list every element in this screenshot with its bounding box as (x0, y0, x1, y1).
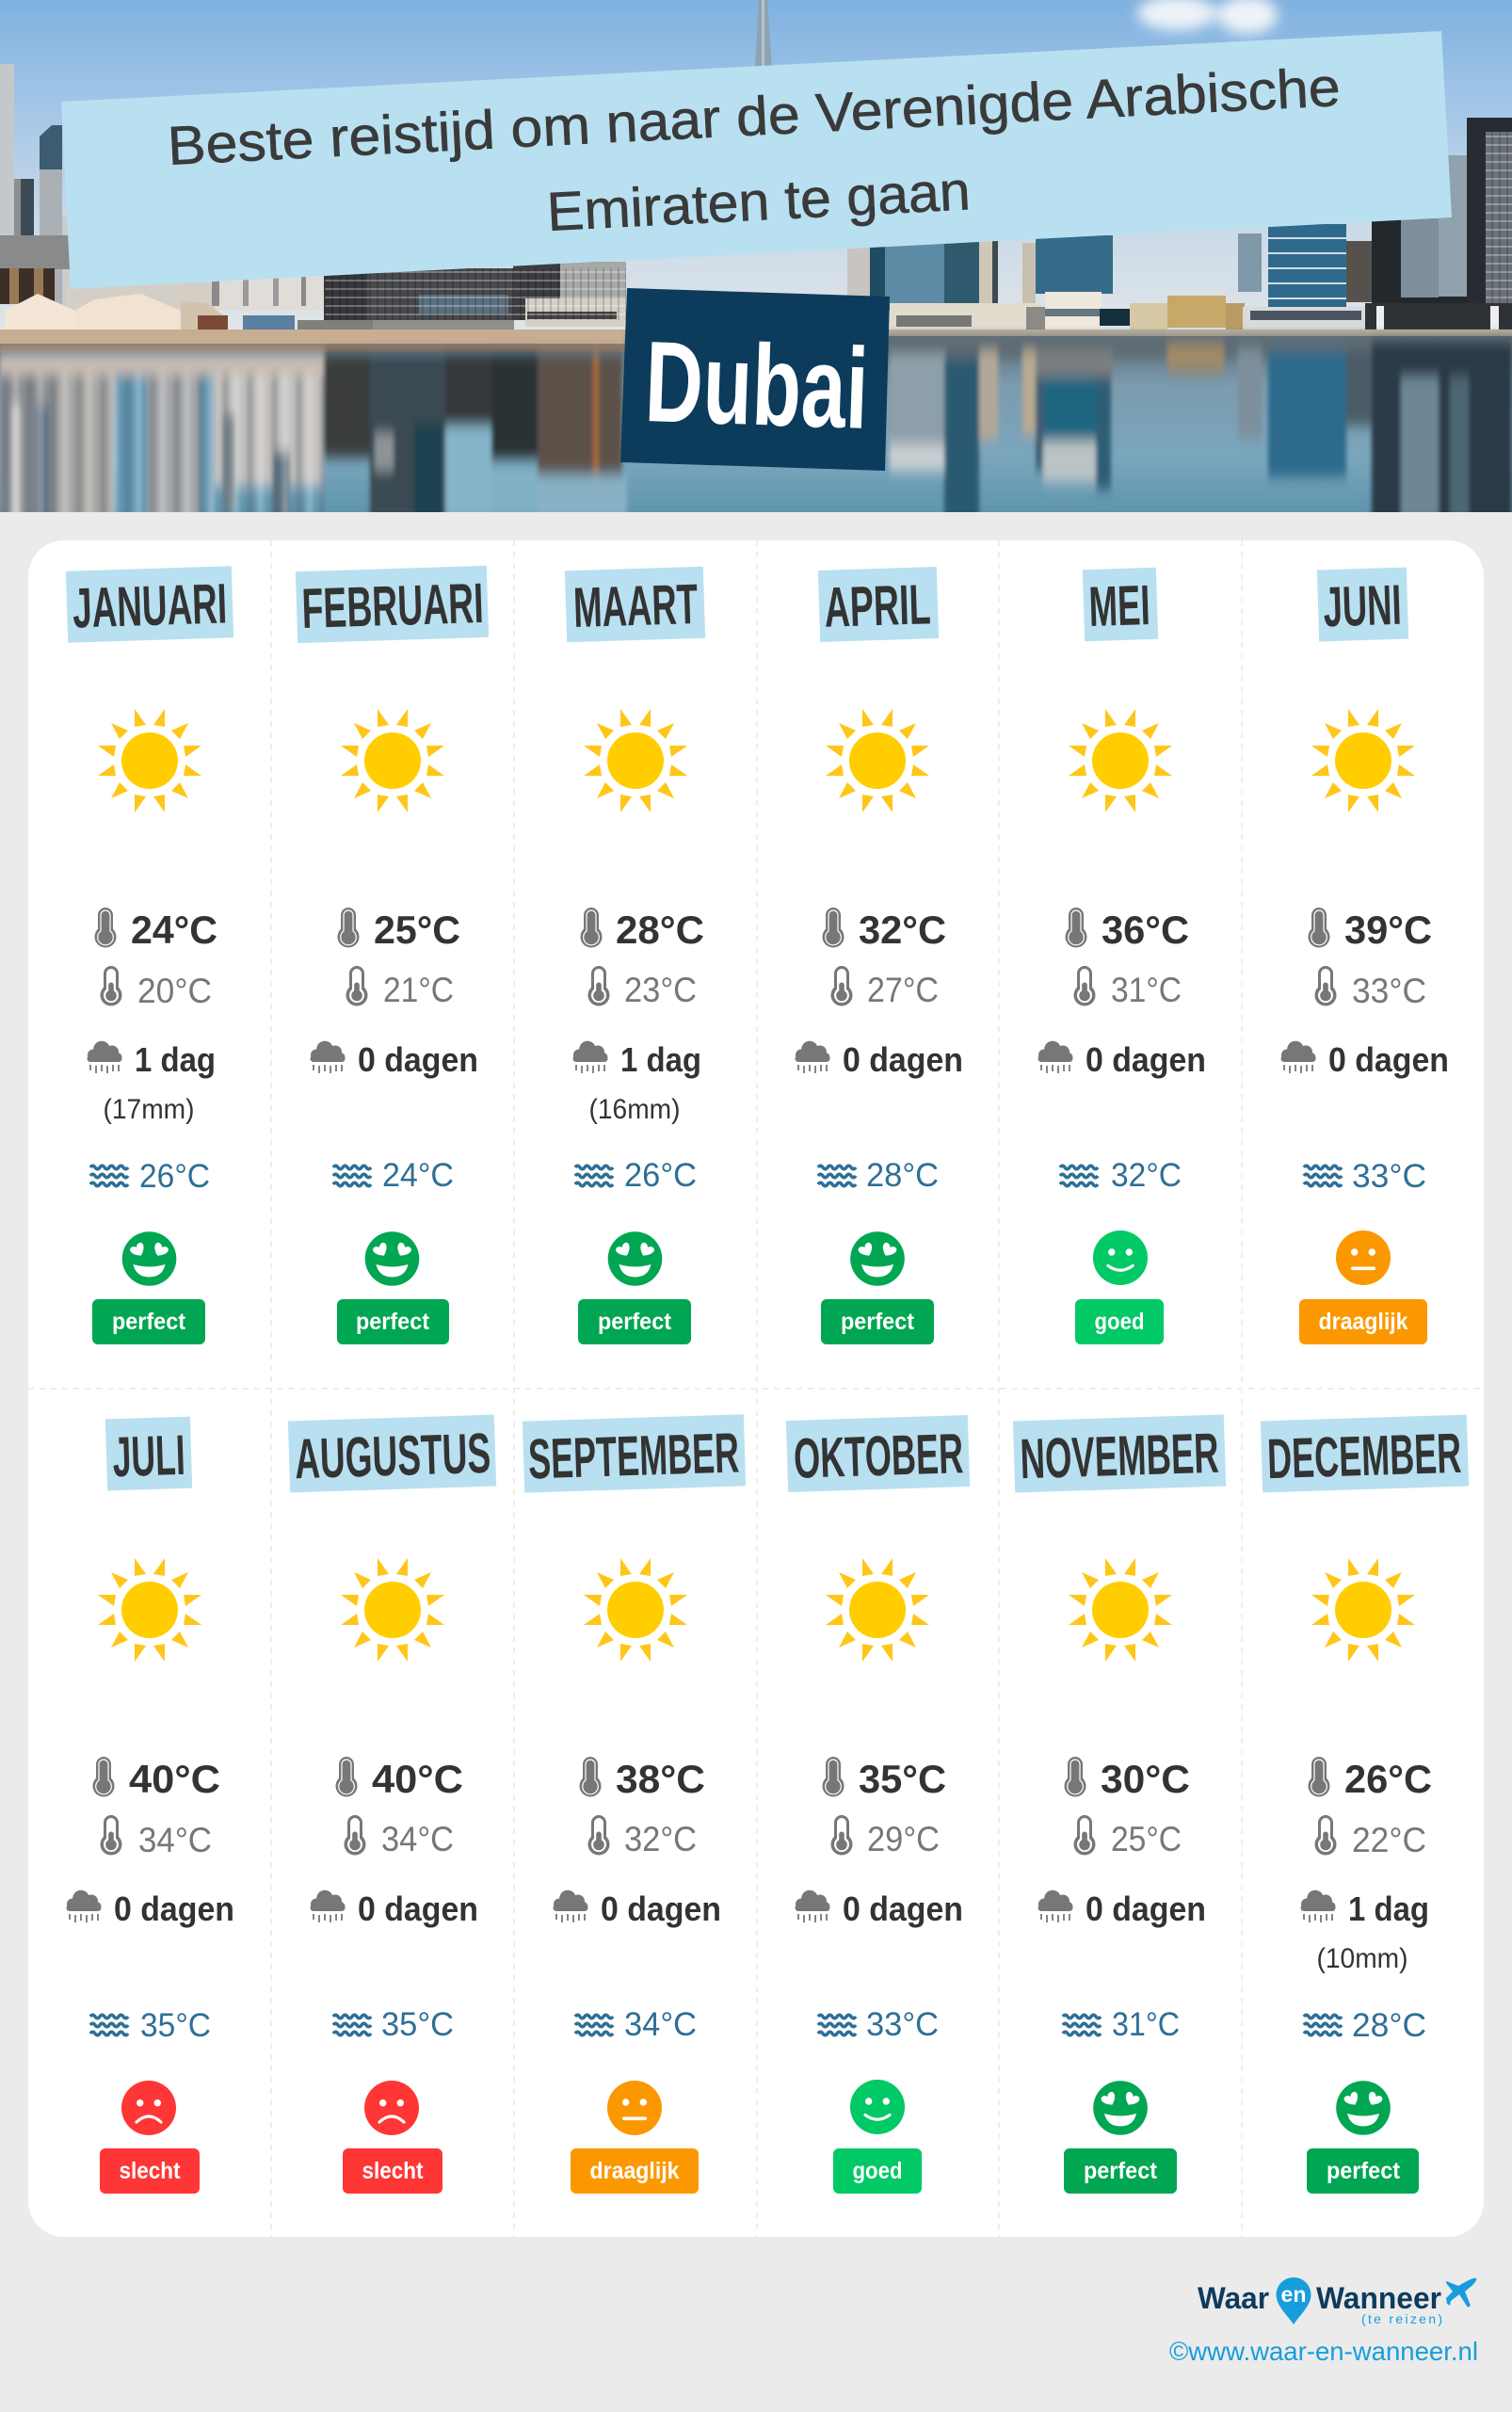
rating badge (821, 1299, 934, 1344)
month: augustus (288, 1415, 496, 2194)
min temperature: 25°C (1111, 1820, 1182, 1858)
rating smiley (1093, 2081, 1148, 2135)
min temperature: 23°C (624, 971, 697, 1009)
rain days (1301, 1889, 1429, 1928)
max temperature: 38°C (616, 1757, 705, 1801)
icon: map pin (1277, 2277, 1311, 2324)
max temperature: 35°C (859, 1757, 946, 1801)
sea temperature: 31°C (1112, 2006, 1180, 2043)
min temperature (100, 966, 212, 1010)
rating smiley (364, 2081, 419, 2135)
rain days: 0 dagen (1086, 1040, 1206, 1079)
month label (66, 566, 233, 643)
min temperature (1314, 966, 1426, 1010)
rain days (572, 1040, 701, 1079)
rating smiley (122, 1231, 176, 1286)
sea temperature (1304, 2007, 1426, 2044)
header photo: Dubai skyline with reflection (0, 0, 1512, 529)
month: april (795, 567, 963, 1344)
rating badge: goed (853, 2158, 902, 2184)
sea temperature (818, 2006, 939, 2043)
rating badge: perfect (598, 1309, 672, 1335)
min temperature: 22°C (1352, 1821, 1426, 1859)
icon: sun (584, 1558, 687, 1662)
rain days (311, 1040, 478, 1079)
rainfall: (17mm) (104, 1094, 194, 1125)
footer logo: Waar en Wanneer: Wanneer (1316, 2281, 1441, 2315)
min temperature: 20°C (137, 972, 212, 1010)
min temperature (345, 1815, 454, 1858)
max temperature (337, 908, 460, 952)
skyline buildings (0, 64, 1512, 334)
min temperature: 34°C (138, 1821, 212, 1859)
max temperature: 24°C (131, 908, 217, 952)
sea temperature (1060, 1157, 1182, 1194)
sea temperature: 28°C (866, 1157, 939, 1194)
min temperature (1073, 1815, 1182, 1858)
rating badge: perfect (841, 1309, 915, 1335)
rating badge (571, 2148, 699, 2194)
sea temperature (333, 1157, 454, 1194)
rain days: 0 dagen (1328, 1040, 1449, 1079)
month: december (1261, 1415, 1469, 2194)
sea temperature (818, 1157, 939, 1194)
sea temperature: 33°C (866, 2006, 939, 2043)
rating badge: slecht (362, 2158, 424, 2184)
rating badge: perfect (1084, 2158, 1158, 2184)
title banner (61, 31, 1452, 289)
month label (786, 1415, 970, 1492)
rating badge: perfect (356, 1309, 430, 1335)
sea temperature: 33°C (1352, 1158, 1426, 1195)
rating smiley (850, 2080, 905, 2134)
rain days: 0 dagen (114, 1889, 234, 1928)
rain days: 1 dag (1348, 1889, 1429, 1928)
rating badge (1307, 2148, 1419, 2194)
icon: sun (826, 709, 929, 812)
weather card (28, 540, 1484, 2237)
min temperature: 34°C (381, 1820, 454, 1858)
min temperature: 33°C (1352, 972, 1426, 1010)
sea temperature: 26°C (624, 1157, 697, 1194)
rain days: 1 dag (620, 1040, 701, 1079)
icon: sun (98, 709, 201, 812)
rain days: 0 dagen (358, 1040, 478, 1079)
min temperature (100, 1815, 212, 1859)
rain days (87, 1040, 216, 1079)
sea temperature (1304, 1158, 1426, 1195)
rain days: 0 dagen (843, 1889, 963, 1928)
min temperature: 31°C (1111, 971, 1182, 1009)
rain days: 0 dagen (601, 1889, 721, 1928)
icon: sun (826, 1558, 929, 1662)
rainfall: (16mm) (589, 1094, 680, 1125)
sea temperature: 34°C (624, 2006, 697, 2043)
rain days (66, 1889, 234, 1928)
rain days (311, 1889, 478, 1928)
icon: sun (98, 1558, 201, 1662)
sea temperature (1063, 2006, 1180, 2043)
month: november (1013, 1415, 1226, 2194)
rating badge (1299, 1299, 1427, 1344)
icon: sun (1069, 1558, 1172, 1662)
rain days (795, 1040, 963, 1079)
rating smiley (1336, 1230, 1391, 1285)
sea temperature (90, 2007, 211, 2044)
min temperature (587, 1815, 697, 1858)
quay (0, 330, 1512, 352)
min temperature: 32°C (624, 1820, 697, 1858)
min temperature: 21°C (383, 971, 454, 1009)
rating smiley (121, 2081, 176, 2135)
max temperature: 40°C (372, 1757, 463, 1801)
min temperature (1073, 966, 1182, 1009)
rating badge (578, 1299, 691, 1344)
icon: sun (584, 709, 687, 812)
rating smiley (607, 2081, 662, 2135)
city label: Dubai: Dubai (643, 317, 871, 453)
max temperature: 26°C (1344, 1757, 1432, 1801)
month label: FEBRUARI (301, 571, 485, 640)
rain days (795, 1889, 963, 1928)
title line 2: Emiraten te gaan (545, 160, 972, 243)
rating smiley (365, 1231, 419, 1286)
rainfall: (10mm) (1316, 1943, 1408, 1974)
rating badge: slecht (119, 2158, 181, 2184)
month label (296, 566, 489, 643)
max temperature (335, 1757, 463, 1801)
rain days (1037, 1889, 1206, 1928)
sea temperature (333, 2006, 454, 2043)
month: juni (1280, 568, 1449, 1344)
rain days: 0 dagen (358, 1889, 478, 1928)
month: mei (1037, 568, 1206, 1344)
month: januari (66, 566, 233, 1344)
min temperature (830, 966, 939, 1009)
month label (565, 567, 705, 642)
sea temperature: 24°C (382, 1157, 454, 1194)
icon: airplane (1446, 2278, 1476, 2307)
max temperature (92, 1757, 220, 1801)
icon: sun (1069, 709, 1172, 812)
month label (105, 1417, 192, 1490)
rating smiley (1093, 1230, 1148, 1285)
footer logo: Waar en Wanneer: Waar (1198, 2281, 1269, 2315)
rating smiley (608, 1231, 662, 1286)
title line 1: Beste reistijd om naar de Verenigde Arabische (166, 56, 1342, 177)
sea temperature (575, 2006, 697, 2043)
footer logo: Waar en Wanneer: (te reizen) (1361, 2311, 1442, 2326)
max temperature: 25°C (374, 908, 460, 952)
max temperature: 28°C (616, 908, 704, 952)
max temperature (94, 908, 217, 952)
rain days (554, 1889, 721, 1928)
max temperature: 30°C (1101, 1757, 1190, 1801)
rating badge (92, 1299, 205, 1344)
rating badge: goed (1094, 1309, 1145, 1335)
month label: SEPTEMBER (527, 1421, 740, 1491)
month label: OKTOBER (793, 1422, 964, 1490)
month label (1317, 568, 1408, 641)
rating badge (1064, 2148, 1177, 2194)
rating smiley (1336, 2081, 1391, 2135)
footer logo: Waar en Wanneer (1198, 2277, 1476, 2326)
rating badge (833, 2148, 922, 2194)
icon: map pin: en (1280, 2282, 1307, 2307)
rain days: 1 dag (135, 1040, 216, 1079)
rain days: 0 dagen (1086, 1889, 1206, 1928)
month label (523, 1414, 746, 1493)
max temperature: 32°C (859, 908, 946, 952)
rating badge: draaglijk (589, 2158, 680, 2184)
rating badge: perfect (1327, 2158, 1401, 2184)
min temperature (1314, 1815, 1426, 1859)
website credit: ©www.waar-en-wanneer.nl (1169, 2337, 1478, 2366)
min temperature (346, 966, 454, 1009)
month label: AUGUSTUS (294, 1422, 491, 1490)
month label: MEI (1088, 573, 1151, 638)
water (0, 331, 1512, 512)
max temperature: 40°C (129, 1757, 220, 1801)
rating badge (1075, 1299, 1164, 1344)
month label: MAART (572, 572, 699, 639)
icon: sun (1311, 709, 1415, 812)
sea temperature: 26°C (139, 1158, 210, 1195)
icon: sun (341, 709, 444, 812)
sea temperature (90, 1158, 210, 1195)
rating smiley (850, 1231, 905, 1286)
icon: sun (1311, 1558, 1415, 1662)
sea temperature (575, 1157, 697, 1194)
city label: Dubai (620, 288, 890, 471)
month: september (523, 1414, 746, 2194)
icon: sun (341, 1558, 444, 1662)
rain days: 0 dagen (843, 1040, 963, 1079)
sea temperature: 35°C (381, 2006, 454, 2043)
sea temperature: 32°C (1111, 1157, 1182, 1194)
month label: JUNI (1323, 573, 1403, 638)
month: februari (296, 566, 489, 1344)
month label (1083, 568, 1158, 641)
month label: APRIL (824, 572, 932, 639)
month: oktober (786, 1415, 970, 2194)
min temperature (587, 966, 697, 1009)
sea temperature: 35°C (140, 2007, 211, 2044)
min temperature: 29°C (867, 1820, 940, 1858)
rating badge (100, 2148, 200, 2194)
reflections (0, 337, 1512, 529)
max temperature: 39°C (1344, 908, 1432, 952)
month label: NOVEMBER (1020, 1422, 1220, 1490)
sea temperature: 28°C (1352, 2007, 1426, 2044)
rating badge: draaglijk (1318, 1309, 1408, 1335)
month label (288, 1415, 496, 1492)
rating badge (337, 1299, 449, 1344)
min temperature (830, 1815, 940, 1858)
rain days (1280, 1040, 1449, 1079)
month label: JULI (112, 1423, 186, 1488)
month label: JANUARI (72, 571, 228, 640)
month label (818, 567, 939, 642)
Burj Khalifa spire (755, 0, 772, 68)
min temperature: 27°C (867, 971, 939, 1009)
month: juli (66, 1417, 234, 2194)
rating badge: perfect (112, 1309, 186, 1335)
month: maart (565, 567, 705, 1344)
rating badge (343, 2148, 442, 2194)
month label (1013, 1415, 1226, 1492)
rain days (1037, 1040, 1206, 1079)
max temperature: 36°C (1102, 908, 1189, 952)
